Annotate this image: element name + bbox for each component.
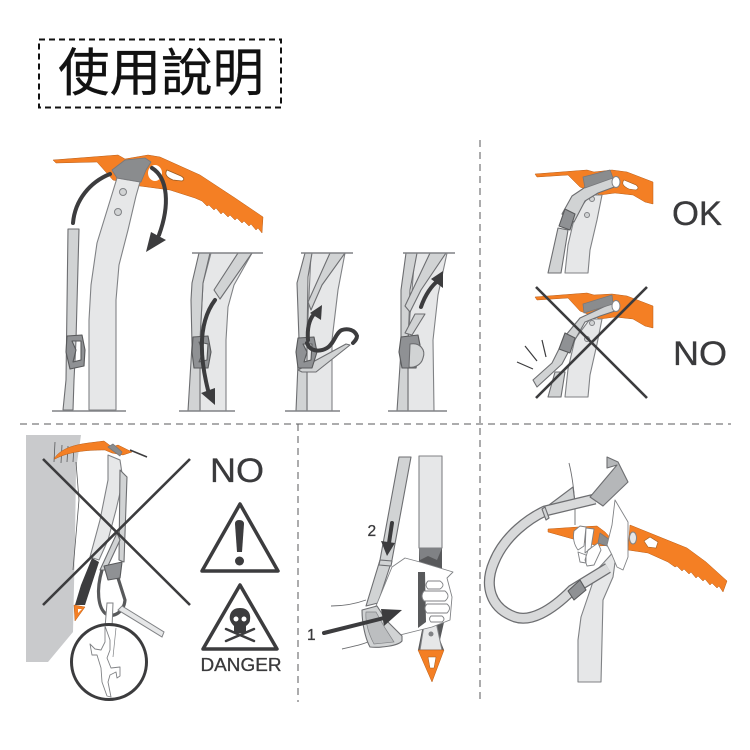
leash and carabiner [119,470,127,562]
arrow 2 [381,523,395,556]
label NO: NO [210,452,264,490]
label OK: OK [672,195,722,233]
head hole [148,165,162,181]
spike [418,650,444,682]
panel: step 4 [388,253,455,411]
circle with climber [72,624,146,700]
handle [418,548,445,650]
panel: step 1 strap threaded through the head hole [52,155,263,411]
handle seen through fingers [418,572,426,628]
strap [366,457,411,606]
handle and spike [75,558,99,605]
label 2: 2 [368,523,376,540]
shaft [89,178,140,410]
strap loop [489,499,608,618]
arrow left [73,174,110,223]
fingers [422,581,450,622]
panel: step 2 [179,253,263,411]
arrow 1 [324,609,402,633]
shaft [419,456,442,548]
arm lines [569,463,575,525]
title: 使用說明: 使用說明 [58,44,264,102]
buckle [66,335,85,369]
panel: step 3 [285,253,357,411]
label DANGER: DANGER [200,655,282,675]
cuff [590,457,628,506]
arrow right [146,168,166,252]
cross [43,459,190,605]
label 1: 1 [307,627,316,644]
panel: NO incorrect position [517,287,727,398]
shaft [578,548,617,682]
cross [536,287,647,398]
hand [376,558,453,637]
forearm lines [331,600,372,649]
axe [54,441,132,459]
panel: danger of falling on wrist loop [26,435,190,700]
pick slot [166,170,184,181]
icon: skull danger triangle [203,585,277,649]
palm [607,500,628,570]
strap [63,229,79,410]
label NO: NO [673,335,727,373]
pick [548,526,617,546]
wrist cuff [362,606,402,647]
ice wall [26,435,81,662]
panel: hand holding axe with looped strap [489,457,727,682]
icon: warning triangle [202,504,278,571]
panel: gripping with wrist loop [307,456,453,682]
fingers [574,526,601,566]
ice axe head [53,155,263,233]
panel: OK correct position [535,170,722,273]
buckle [568,580,586,600]
grey head piece [112,158,151,182]
